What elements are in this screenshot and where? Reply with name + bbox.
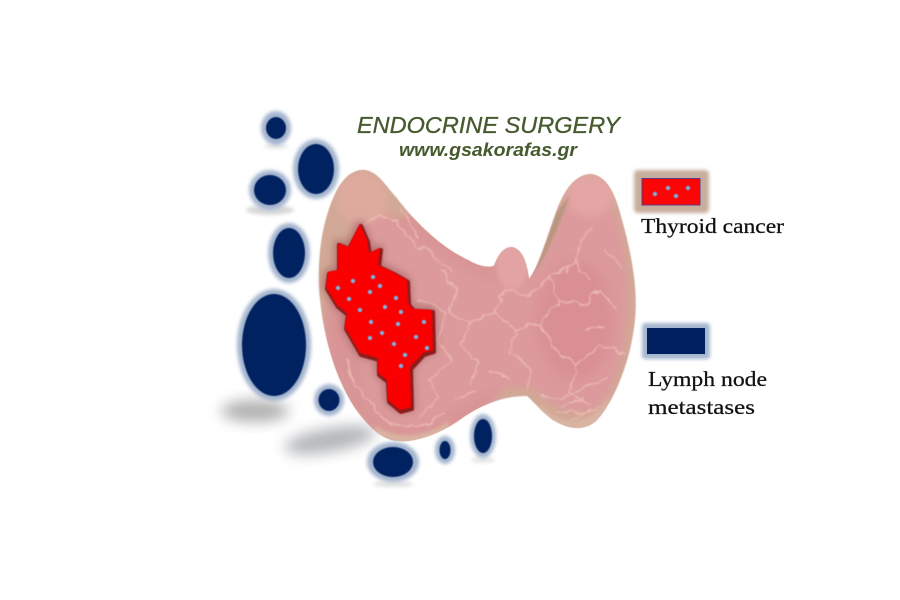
legend label: lymph node metastases: Lymph node bbox=[648, 367, 767, 391]
cast shadows under lymph nodes bbox=[221, 143, 495, 487]
node cores bbox=[242, 117, 492, 477]
legend label: thyroid cancer: Thyroid cancer bbox=[641, 214, 784, 238]
legend label: lymph node metastases: metastases bbox=[648, 395, 755, 419]
legend swatch: lymph node bbox=[642, 323, 710, 359]
bottom and side edge tint bbox=[538, 402, 609, 428]
node halos bbox=[237, 111, 496, 482]
thyroid gland bbox=[319, 170, 636, 450]
lobule cracks bbox=[345, 208, 625, 426]
right lobe inner fold bbox=[534, 196, 570, 274]
legend: thyroid cancer bbox=[634, 170, 784, 238]
infographic canvas bbox=[216, 109, 784, 488]
lymph node metastases bbox=[237, 111, 496, 482]
thyroid tumour bbox=[326, 224, 434, 412]
legend: lymph node metastases bbox=[642, 323, 767, 419]
tumour cell dots bbox=[336, 275, 429, 368]
title: ENDOCRINE SURGERY bbox=[357, 112, 622, 138]
gland body shading bbox=[325, 215, 515, 445]
legend swatch: tumour bbox=[634, 170, 709, 213]
website: www.gsakorafas.gr bbox=[399, 140, 578, 160]
